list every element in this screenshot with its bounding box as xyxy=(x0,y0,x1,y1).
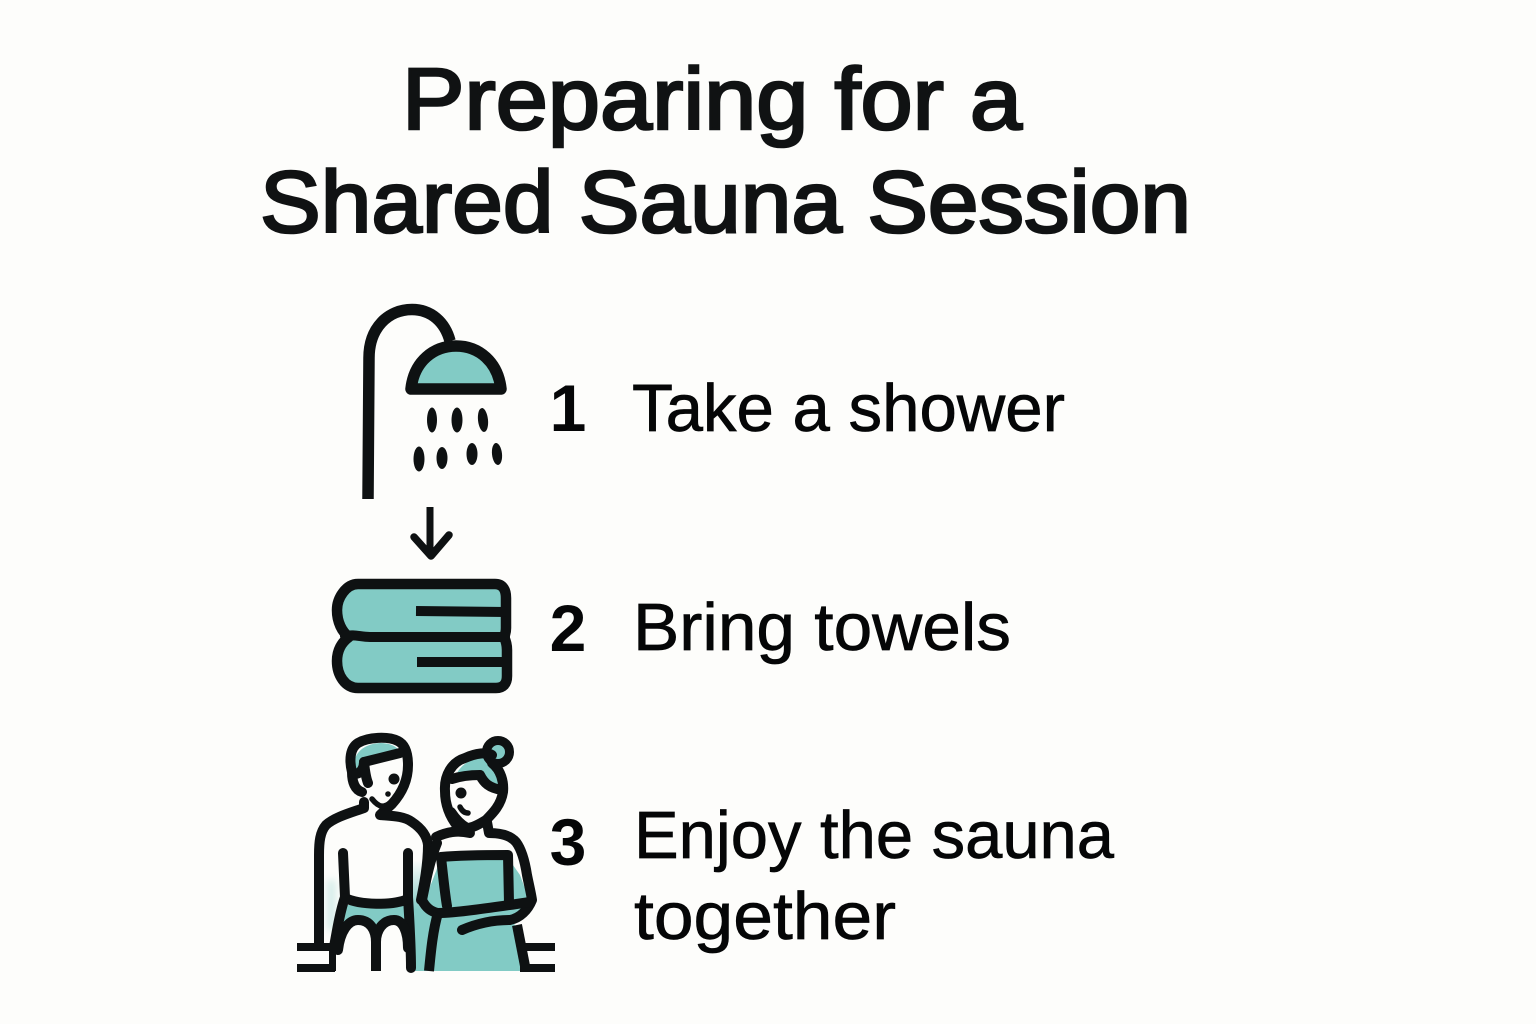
man hair xyxy=(354,743,400,773)
man body xyxy=(319,802,364,945)
step 2: Bring towels xyxy=(633,590,1011,665)
title: Preparing for a xyxy=(402,51,1023,148)
woman dress xyxy=(425,858,530,971)
title: Shared Sauna Session xyxy=(260,154,1191,251)
woman head xyxy=(445,753,492,827)
step 3: together xyxy=(634,879,896,954)
icon: towels xyxy=(337,584,507,688)
faint teal shading left of man xyxy=(328,880,335,930)
woman bun xyxy=(486,740,510,764)
man waist teal xyxy=(341,905,409,926)
faces xyxy=(385,774,466,798)
woman hair xyxy=(456,757,499,789)
teal strip between figures xyxy=(411,860,431,971)
woman body xyxy=(436,832,470,837)
title xyxy=(260,51,1191,251)
step 1: Take a shower xyxy=(632,371,1065,446)
step 3 xyxy=(550,798,1115,954)
benches xyxy=(297,943,555,972)
step 1: 1 xyxy=(550,371,586,445)
man head xyxy=(350,738,408,814)
icon: shower xyxy=(368,310,503,499)
step 3: 3 xyxy=(550,805,586,879)
step 3: Enjoy the sauna xyxy=(634,798,1115,873)
icon: two people in the sauna xyxy=(297,738,555,972)
arrow: shower to towels xyxy=(414,507,449,556)
step 2: 2 xyxy=(550,591,586,665)
